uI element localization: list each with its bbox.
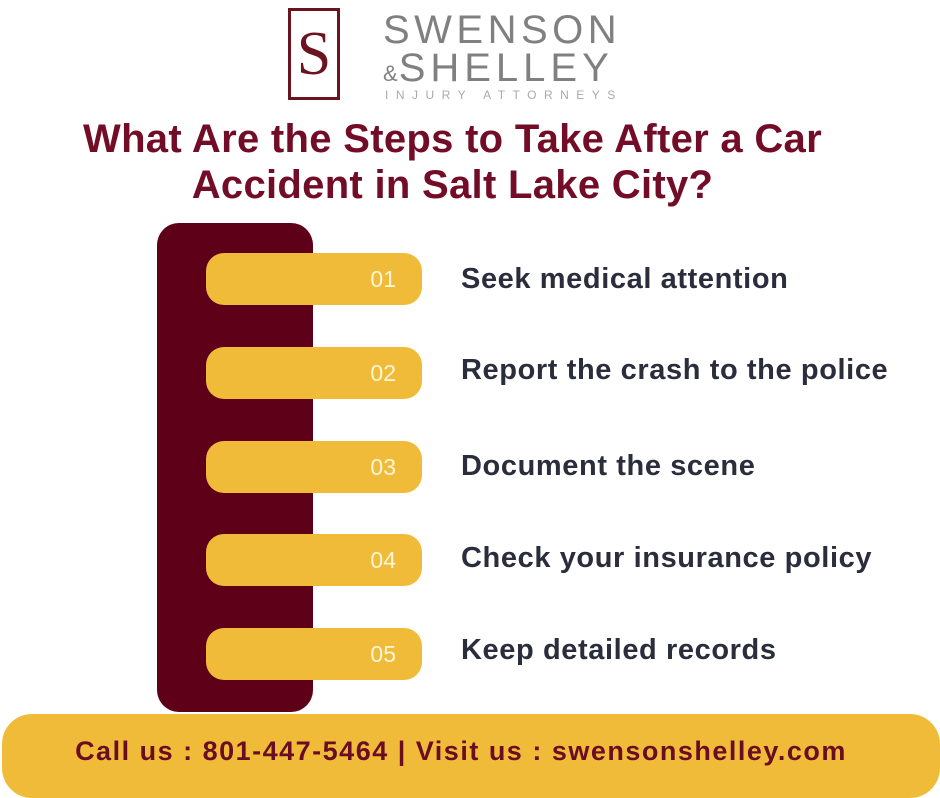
step 5: 05 [370, 641, 396, 667]
title: What Are the Steps to Take After a Car [83, 117, 822, 161]
title [83, 117, 822, 207]
step 1: Seek medical attention [461, 263, 788, 295]
footer contact bar [2, 714, 940, 798]
logo: &SHELLEY [383, 46, 614, 90]
step 1: 01 [370, 266, 396, 292]
step 5: Keep detailed records [461, 634, 777, 666]
step 4: Check your insurance policy [461, 542, 872, 574]
step 3 [206, 441, 755, 493]
footer contact bar: Call us : 801-447-5464 | Visit us : swensonshelley.com [75, 736, 847, 766]
step 4 [206, 534, 872, 586]
logo text: SWENSON [383, 8, 621, 52]
dark vertical panel [157, 223, 313, 712]
logo: INJURY ATTORNEYS [385, 88, 623, 102]
step 3: Document the scene [461, 450, 755, 482]
step 1 [206, 253, 788, 305]
step 4: 04 [370, 547, 396, 573]
title: Accident in Salt Lake City? [192, 163, 713, 207]
step 5 [206, 628, 777, 680]
logo mark [288, 8, 340, 100]
step 2: 02 [370, 360, 396, 386]
step 3: 03 [370, 454, 396, 480]
step 2: Report the crash to the police [461, 354, 888, 386]
logo [288, 8, 623, 102]
step 2 [206, 347, 888, 399]
logo mark: S [297, 20, 331, 88]
